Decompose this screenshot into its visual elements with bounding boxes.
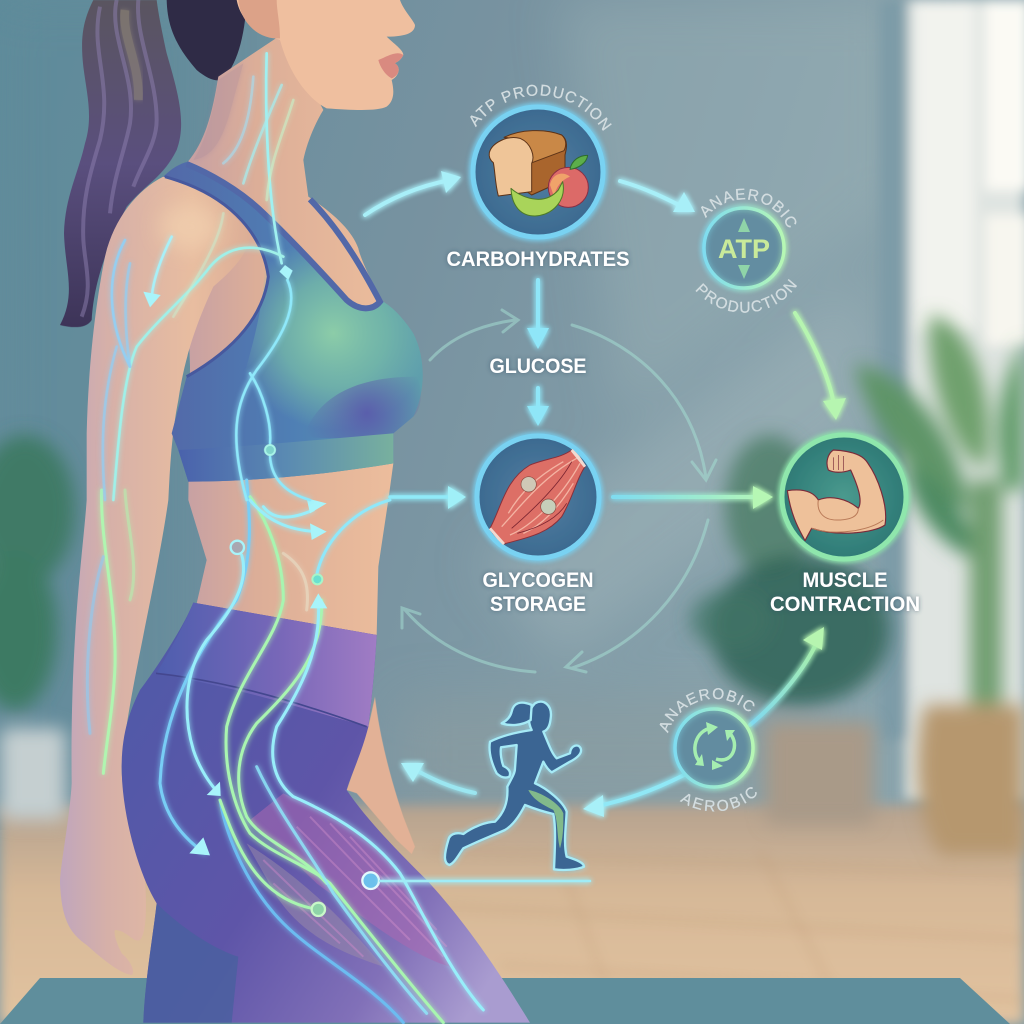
label: muscle contraction	[770, 569, 920, 616]
highlighted leg muscle	[528, 790, 563, 848]
bra hem band	[178, 433, 393, 482]
energy pathways	[87, 480, 483, 1023]
neck and torso skin	[183, 33, 393, 635]
node: muscle contraction	[770, 435, 920, 616]
label: ATP: ATP	[718, 234, 770, 264]
floor	[0, 805, 1024, 1024]
far arm	[347, 697, 415, 854]
label: glucose: GLUCOSE	[490, 355, 586, 378]
label: glycogen storage: STORAGE	[490, 593, 586, 616]
ponytail hair	[60, 0, 181, 327]
thigh muscle	[247, 793, 450, 967]
left plant and pot	[0, 435, 75, 820]
arrow: runner to body	[401, 763, 475, 793]
centre plant and pot	[690, 435, 890, 824]
label: ATP production: ATP PRODUCTION	[470, 84, 612, 131]
label: production: PRODUCTION	[696, 279, 797, 313]
arrows	[365, 171, 846, 881]
upper pathway arrowheads	[143, 265, 293, 307]
shoulder highlight	[160, 203, 220, 250]
pathway nodes lower	[231, 541, 379, 916]
face	[237, 0, 415, 110]
upper pathways	[103, 53, 310, 500]
label: anaerobic: ANAEROBIC	[660, 688, 754, 734]
icon: up and down arrows	[738, 218, 750, 279]
bra lower shading	[303, 377, 421, 438]
woman figure	[60, 0, 530, 1023]
label: glycogen storage: GLYCOGEN	[482, 569, 594, 592]
node: ATP anaerobic production	[696, 188, 797, 313]
arrow: glycogen to muscle	[613, 486, 773, 509]
arrow: cycle to runner	[583, 775, 684, 817]
line: thigh to runner	[380, 880, 590, 882]
leggings	[87, 480, 530, 1023]
arrow: carbohydrates to ATP	[620, 181, 695, 212]
ear	[238, 0, 280, 38]
icon: flexed arm	[787, 450, 886, 541]
upper pathway node	[265, 445, 275, 455]
near arm	[60, 177, 250, 975]
icon: cycle arrows	[695, 722, 735, 770]
neck shadow	[193, 63, 243, 160]
bra cup shading	[237, 203, 423, 438]
arrow: body to carbohydrates	[365, 171, 461, 215]
icon: bread and fruit	[489, 131, 588, 216]
right plant and basket	[855, 315, 1024, 855]
bra strap trim	[187, 164, 380, 308]
arrow: carbohydrates to glucose	[527, 280, 549, 349]
label: carbohydrates: CARBOHYDRATES	[446, 248, 630, 271]
lips	[378, 53, 403, 78]
faint cycle ring	[402, 310, 716, 672]
label: muscle contraction: MUSCLE	[802, 569, 888, 592]
icon: runner silhouette	[445, 702, 584, 870]
waistband seam	[156, 673, 367, 727]
label: aerobic: AEROBIC	[680, 787, 757, 812]
icon: muscle with glycogen granules	[490, 450, 585, 544]
label: anaerobic: ANAEROBIC	[701, 188, 796, 228]
label: glycogen storage	[482, 569, 594, 616]
arrow: glucose to glycogen	[527, 388, 549, 426]
label: muscle contraction: CONTRACTION	[770, 593, 920, 616]
arrow: body to glycogen	[390, 486, 466, 509]
window and white wall	[880, 0, 1024, 800]
head hair	[167, 0, 247, 80]
sports bra	[163, 162, 423, 482]
node: carbohydrates	[445, 84, 631, 271]
yoga mat	[0, 978, 1010, 1024]
back leg	[143, 903, 238, 1023]
pathway arrowheads	[189, 498, 327, 855]
node: glycogen storage	[477, 436, 599, 616]
node: anaerobic and aerobic cycle	[660, 688, 759, 812]
armhole trim	[165, 177, 268, 377]
leggings waistband	[157, 603, 377, 727]
arrow: ATP to muscle	[795, 313, 846, 420]
arrow: cycle to muscle	[750, 627, 824, 725]
